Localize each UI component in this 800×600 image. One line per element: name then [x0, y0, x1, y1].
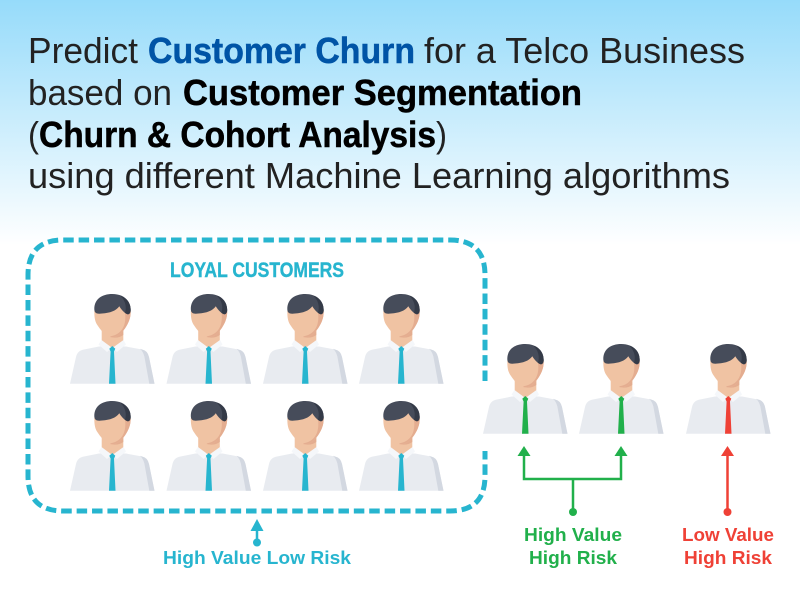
label: low value high risk [682, 525, 774, 568]
label: low value high risk: Low Value [682, 525, 774, 545]
panel: loyal customers dashed boundary [28, 240, 485, 511]
title: ( [28, 114, 39, 155]
heading: loyal customers: LOYAL CUSTOMERS [170, 259, 344, 282]
label: high value high risk: High Value [524, 525, 622, 545]
title: Churn & Cohort Analysis [39, 114, 436, 155]
icon: low value high risk person [686, 344, 770, 434]
title: Customer Churn [148, 30, 415, 71]
title [28, 30, 745, 196]
title: based on [28, 72, 172, 113]
label: high value low risk: High Value Low Risk [163, 548, 352, 568]
label: high value high risk [524, 525, 622, 568]
title: ) [436, 114, 447, 155]
group: loyal customers people [70, 294, 444, 491]
background gradient [0, 0, 800, 245]
title: using different Machine Learning algorithms [28, 155, 730, 196]
label: low value high risk: High Risk [684, 548, 773, 568]
arrow: low value high risk [721, 446, 734, 516]
arrow: high value high risk bracket [518, 446, 628, 516]
arrow: loyal customers [250, 519, 264, 546]
title: Predict [28, 30, 138, 71]
group: high value high risk people [483, 344, 664, 434]
label: high value high risk: High Risk [529, 548, 618, 568]
title: Customer Segmentation [183, 72, 582, 113]
title: for a Telco Business [424, 30, 745, 71]
